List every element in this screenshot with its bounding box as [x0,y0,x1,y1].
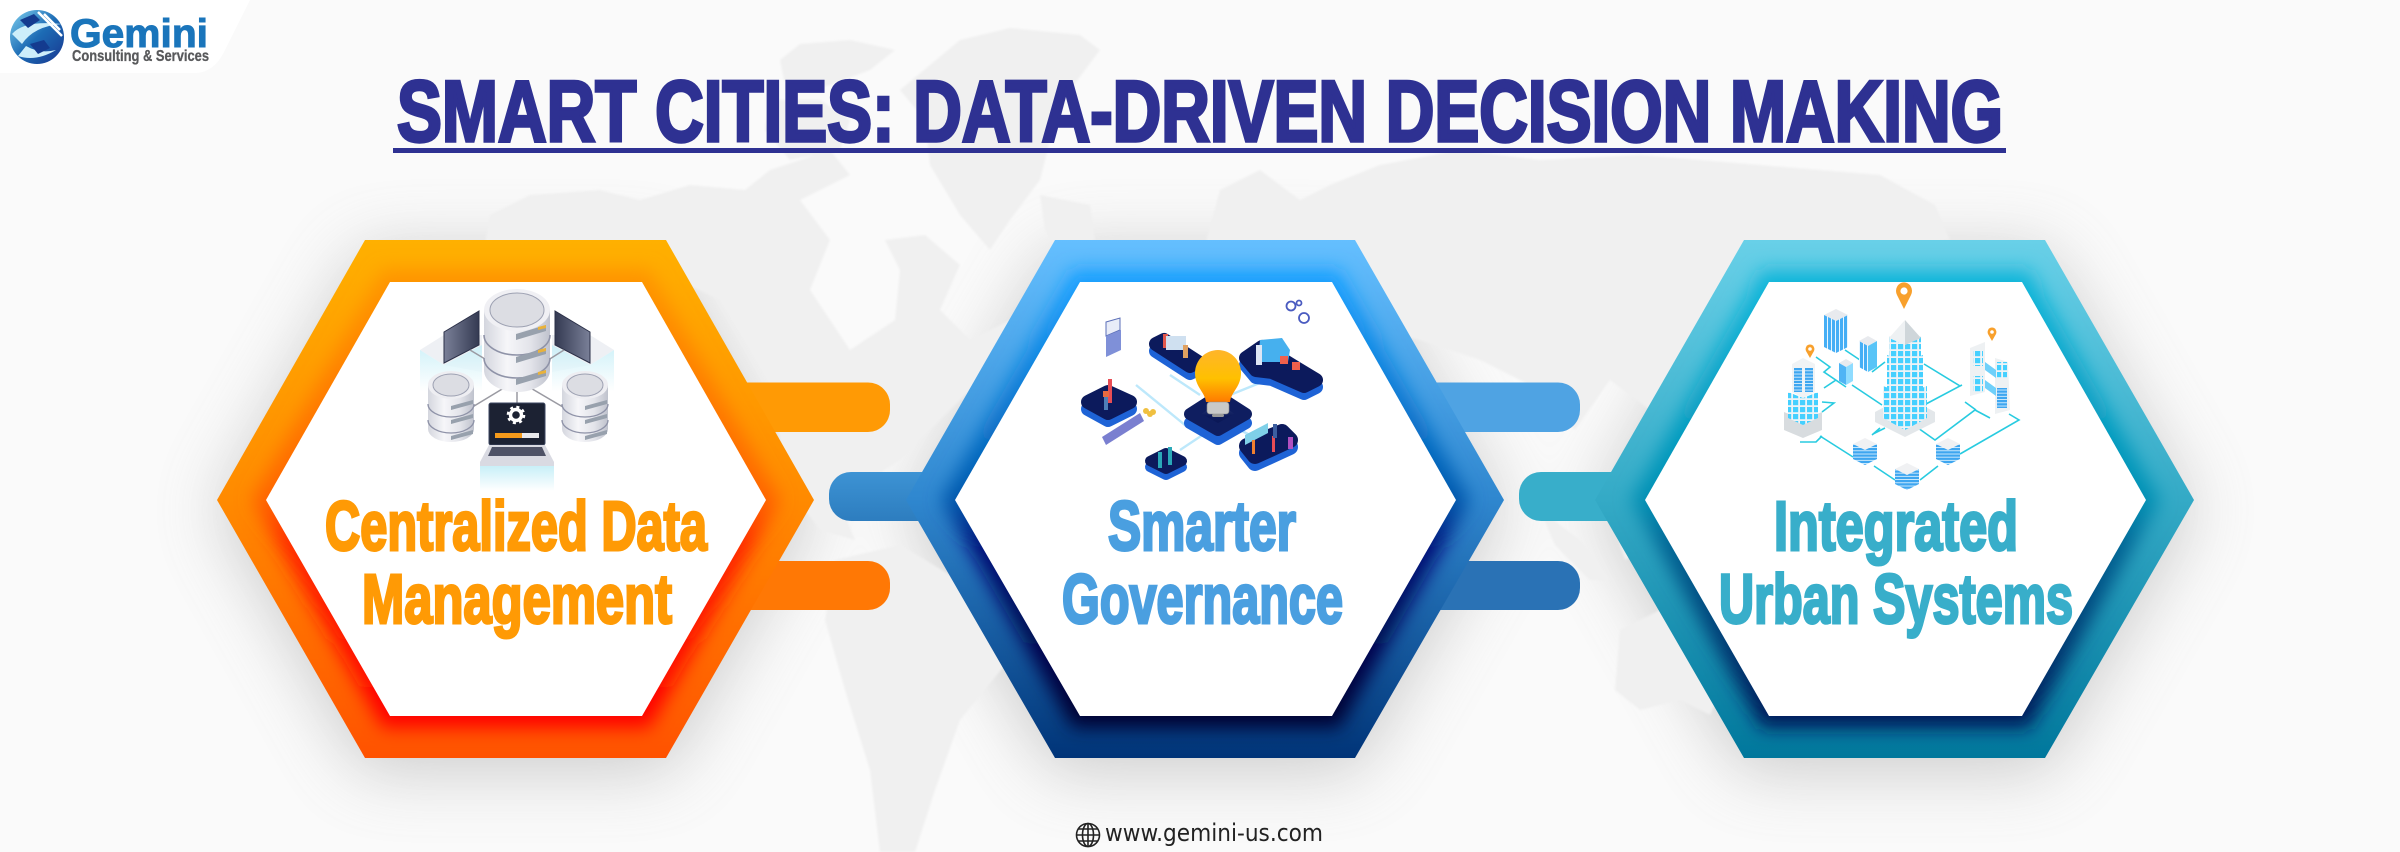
connector: blue left [829,472,960,521]
logo wordmark: Gemini [70,12,208,56]
website url: www.gemini-us.com [1105,819,1323,847]
label: smarter governance: Smarter [1108,487,1296,565]
panel: smarter governance [906,240,1504,758]
connector: teal left [1519,472,1650,521]
title: SMART CITIES: DATA-DRIVEN DECISION MAKING [397,64,2003,160]
label: centralized data management: Centralized Data [325,487,708,565]
label: integrated urban systems [1719,487,2073,638]
building: left tower [1784,358,1822,438]
logo globe [10,10,64,64]
connector: blue top [1410,382,1580,432]
icon: location pins [1806,282,1996,358]
label: centralized data management [325,487,708,638]
connector: blue bottom [1410,561,1580,610]
icon: data servers and laptops [420,289,614,491]
connector: orange bottom [720,561,890,610]
label: integrated urban systems: Integrated [1774,487,2018,565]
icon: globe [1076,824,1100,846]
label: integrated urban systems: Urban Systems [1719,560,2073,638]
building: right complex [1970,342,2010,414]
logo panel [0,0,250,73]
icon: light bulb network [1088,300,1316,475]
label: centralized data management: Management [362,560,672,638]
footer website [1076,819,1323,847]
building: server blocks [1853,438,1960,490]
building: tall left block [1824,309,1877,385]
logo tagline: Consulting & Services [72,48,209,65]
label: smarter governance: Governance [1062,560,1343,638]
panel: integrated urban systems [1595,240,2194,758]
background world map [482,28,1950,852]
panel: centralized data management [217,240,814,758]
icon: connected smart city [1784,282,2019,490]
label: smarter governance [1062,487,1343,638]
connector: orange top [720,382,890,432]
hexagon drop shadows [217,250,2194,772]
building: central tower [1875,320,1935,437]
